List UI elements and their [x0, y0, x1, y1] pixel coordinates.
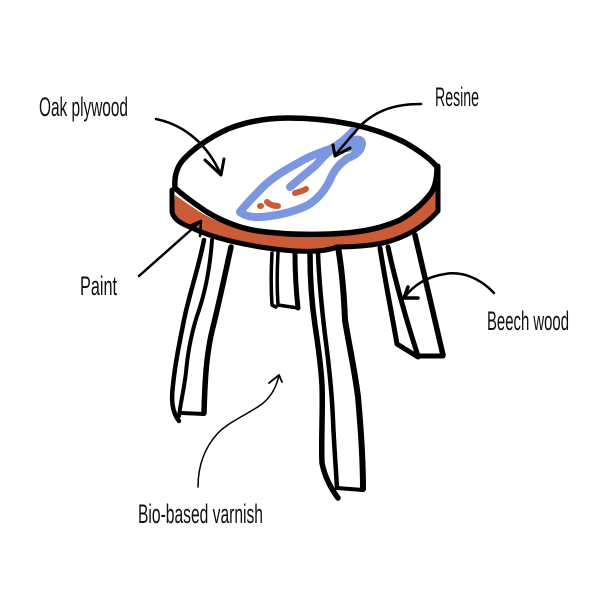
label: Bio-based varnish: Bio-based varnish [138, 499, 263, 529]
arrow: Paint [139, 221, 201, 276]
resin inlay [240, 131, 362, 217]
seat: painted edge [172, 166, 438, 251]
left leg [172, 240, 231, 421]
label: Oak plywood: Oak plywood [39, 92, 128, 122]
seat: top outline [175, 118, 437, 234]
front leg [310, 247, 363, 498]
arrow: Resine [333, 104, 421, 156]
arrow: Oak plywood [156, 119, 224, 175]
label: Paint: Paint [80, 271, 117, 301]
resin red flecks [260, 189, 306, 206]
right leg [380, 235, 443, 357]
arrow: Bio-based varnish [198, 375, 282, 487]
back leg [271, 253, 298, 308]
label: Resine: Resine [435, 82, 479, 112]
arrow: Beech wood [404, 273, 494, 298]
